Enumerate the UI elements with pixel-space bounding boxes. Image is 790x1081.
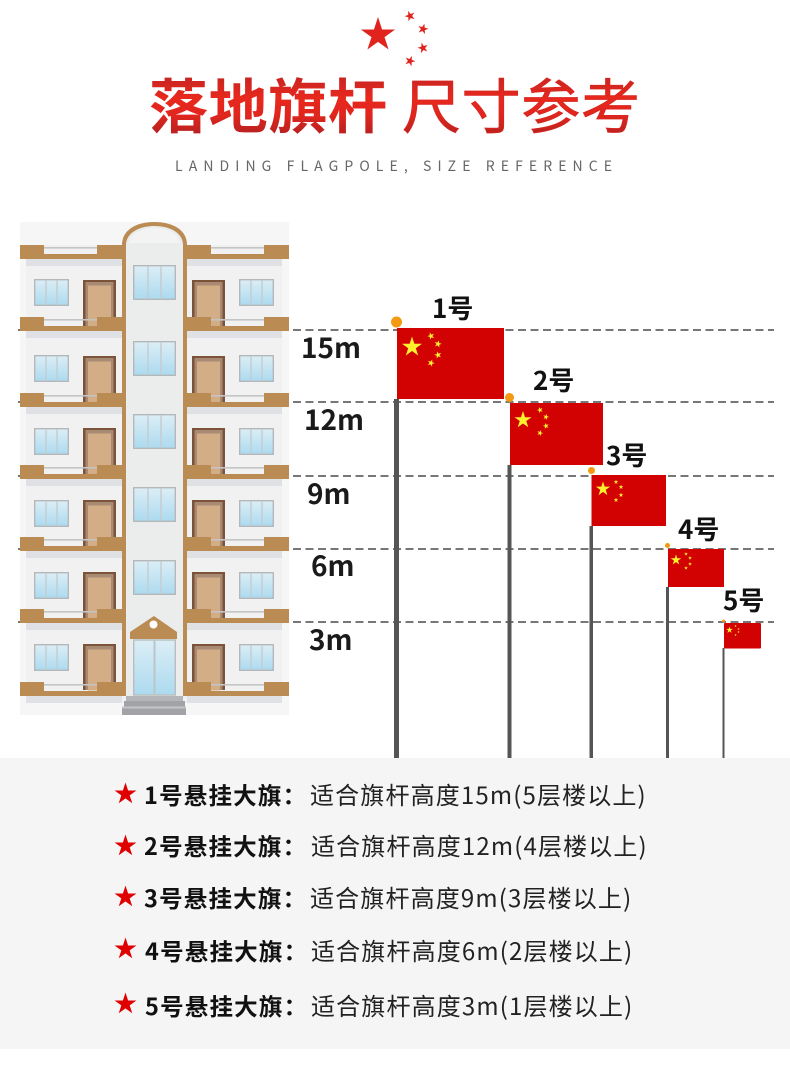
flag 4 on pole — [665, 543, 724, 759]
row 4: 适合旗杆高度6m(2层楼以上) — [311, 932, 633, 967]
row 1: 适合旗杆高度15m(5层楼以上) — [310, 776, 647, 811]
steps — [122, 696, 186, 715]
row 2 — [115, 827, 648, 862]
label: flag 4: 4号 — [678, 510, 719, 547]
label: flag 2: 2号 — [533, 361, 574, 398]
entrance — [130, 616, 177, 695]
row 4: 4号悬挂大旗： — [145, 933, 308, 967]
title: 尺寸参考 — [402, 60, 640, 145]
height reference dashed lines — [18, 330, 774, 622]
icon: five stars emblem — [361, 9, 429, 67]
flag 5 on pole — [722, 620, 761, 759]
row 5 — [115, 987, 633, 1022]
flag 2 on pole — [505, 393, 603, 759]
height labels: 9m — [307, 473, 351, 513]
flag 3 on pole — [588, 467, 666, 759]
height labels: 6m — [311, 545, 355, 585]
row 3: 3号悬挂大旗： — [144, 880, 307, 914]
title — [149, 60, 640, 145]
doors — [83, 280, 225, 690]
left and right windows — [35, 280, 273, 670]
row 2: 2号悬挂大旗： — [144, 828, 307, 862]
label: flag 1: 1号 — [432, 289, 473, 326]
illustration: apartment building — [20, 222, 289, 715]
panel: size list — [0, 758, 790, 1049]
height labels: 15m — [301, 327, 361, 367]
row 3 — [115, 879, 632, 914]
row 2: 适合旗杆高度12m(4层楼以上) — [311, 827, 648, 862]
row 1: 1号悬挂大旗： — [144, 777, 307, 811]
height labels: 12m — [304, 399, 364, 439]
label: flag 3: 3号 — [606, 436, 647, 473]
height labels: 3m — [309, 619, 353, 659]
row 1 — [115, 776, 647, 811]
flag 1 on pole — [391, 316, 504, 759]
label: flag 5: 5号 — [723, 581, 764, 618]
row 5: 5号悬挂大旗： — [145, 988, 308, 1022]
title: 落地旗杆 — [149, 60, 387, 145]
floor bands — [20, 245, 289, 703]
subtitle: LANDING FLAGPOLE, SIZE REFERENCE — [175, 156, 612, 176]
central tower — [122, 222, 187, 696]
height labels — [301, 327, 364, 659]
row 4 — [115, 932, 633, 967]
row 5: 适合旗杆高度3m(1层楼以上) — [311, 987, 633, 1022]
row 3: 适合旗杆高度9m(3层楼以上) — [310, 879, 632, 914]
